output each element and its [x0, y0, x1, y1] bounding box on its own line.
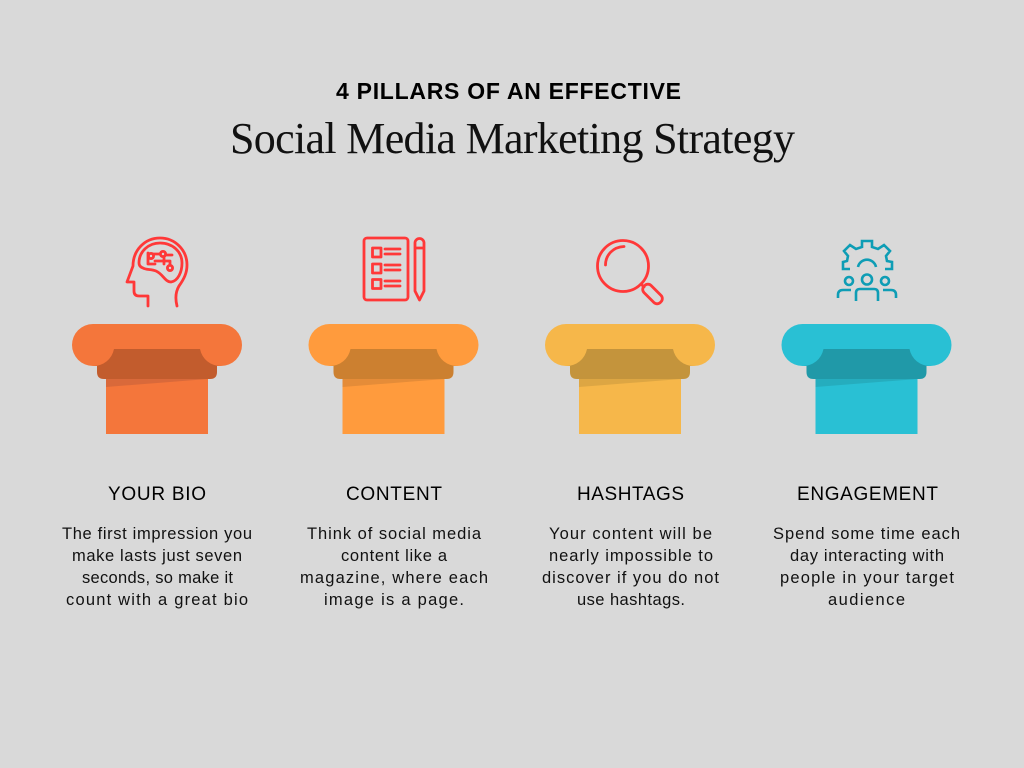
pillar: engagement — [782, 324, 952, 434]
column text: content: magazine, where each — [300, 569, 488, 587]
pillar: content — [308, 324, 478, 434]
column text: your bio: The first impression you — [62, 525, 252, 543]
column text: content: CONTENT — [346, 484, 442, 505]
column text: content: image is a page. — [324, 591, 464, 609]
column text: hashtags: discover if you do not — [542, 569, 719, 587]
column text: content: Think of social media — [307, 525, 482, 543]
column text: engagement — [773, 484, 960, 609]
column text: your bio: YOUR BIO — [108, 484, 206, 505]
pillar: hashtags — [545, 324, 715, 434]
title: social media marketing strategy: Social Media Marketing Strategy — [230, 114, 795, 163]
column text: engagement: Spend some time each — [773, 525, 960, 543]
column text: hashtags: nearly impossible to — [549, 547, 713, 565]
column text: hashtags: use hashtags. — [577, 591, 685, 609]
column text: your bio: make lasts just seven — [72, 547, 242, 565]
column text: your bio: seconds, so make it — [82, 569, 233, 587]
column text: engagement: people in your target — [780, 569, 954, 587]
icon: document and pencil — [364, 238, 424, 300]
icon: gear with team — [838, 241, 896, 301]
column text: engagement: ENGAGEMENT — [797, 484, 938, 505]
column text: engagement: day interacting with — [790, 547, 944, 565]
column text: engagement: audience — [828, 591, 905, 609]
icon: magnifying glass — [598, 240, 664, 306]
column text: hashtags — [542, 484, 719, 609]
pillar: your bio — [72, 324, 242, 434]
icon: head with brain — [127, 238, 187, 306]
column text: content: content like a — [341, 547, 448, 565]
heading: 4 pillars: 4 PILLARS OF AN EFFECTIVE — [336, 78, 681, 104]
column text: your bio — [62, 484, 252, 609]
column text: hashtags: Your content will be — [549, 525, 712, 543]
column text: hashtags: HASHTAGS — [577, 484, 684, 505]
column text: content — [300, 484, 488, 609]
column text: your bio: count with a great bio — [66, 591, 248, 609]
